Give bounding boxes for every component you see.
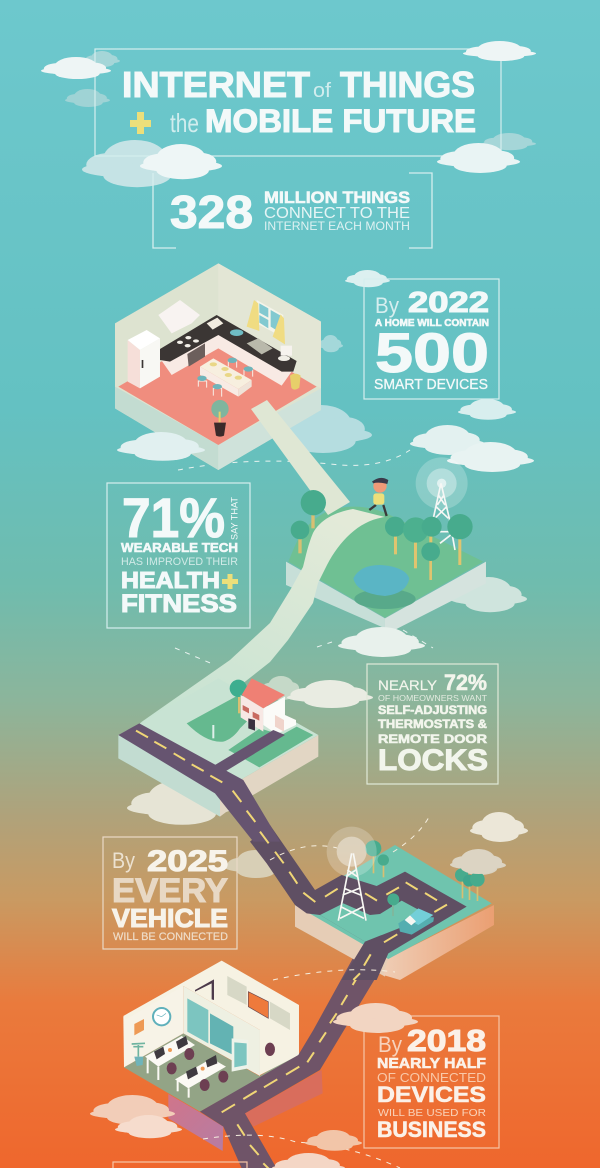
panel: 71 percent wearable: [107, 483, 250, 628]
panel: nearly 72 percent: OF HOMEOWNERS WANT: [378, 693, 487, 703]
fridge: [128, 340, 140, 388]
cloud: pale left: [65, 89, 110, 107]
car: [398, 908, 434, 935]
panel: by 2025: EVERY: [112, 872, 228, 910]
panel: by 2022: 500: [375, 321, 489, 384]
glow over tower: [327, 827, 377, 877]
pond: [353, 565, 409, 596]
glass door: [232, 1038, 248, 1072]
stat: 328 million things: CONNECT TO THE: [264, 205, 410, 222]
cloud: left of tower: [225, 850, 285, 878]
panel: by 2022: By: [375, 293, 399, 318]
panel: by 2018: DEVICES: [377, 1082, 486, 1107]
house island top: [118, 678, 318, 792]
radio tower: [433, 483, 455, 550]
stat: 328 million things: [170, 186, 410, 238]
scene: hill foreground: [291, 457, 473, 580]
panel: nearly 72 percent: REMOTE DOOR: [378, 732, 487, 746]
trash bin: [290, 374, 301, 390]
road loop: [250, 825, 467, 980]
wall art: [134, 1019, 144, 1035]
hill top: [288, 507, 483, 618]
cloud: small by stat: [345, 270, 390, 287]
car island left side: [295, 903, 388, 977]
stools: [198, 361, 253, 397]
scene: house island: [118, 678, 318, 843]
panel: by 2018: NEARLY HALF: [377, 1056, 486, 1072]
panel: by 2018: By: [378, 1032, 402, 1057]
scene: park hill island: [286, 507, 486, 634]
inner lawn: [320, 901, 430, 942]
cloud: mid right 1: [458, 399, 516, 420]
desk 2: [175, 1055, 226, 1098]
cloud: under room: [117, 432, 205, 461]
scene: office island: [123, 948, 393, 1168]
car island top: [295, 845, 492, 959]
counter top: [160, 315, 297, 372]
hill left side: [286, 562, 385, 628]
cloud: mid right 2: [410, 425, 485, 455]
cloud: white top left: [41, 57, 111, 79]
road: [200, 948, 393, 1168]
panel: by 2022: A HOME WILL CONTAIN: [375, 318, 489, 329]
road dashes: [136, 731, 269, 843]
cloud: white right: [437, 143, 520, 173]
curtains: [247, 300, 259, 331]
island counter: [200, 367, 238, 397]
footpath from room to hill: [251, 400, 350, 515]
panel: by 2018: 2018: [407, 1023, 486, 1058]
panel: by 2022: SMART DEVICES: [374, 377, 488, 393]
radio tower glow: [416, 457, 468, 509]
house door: [248, 718, 255, 731]
house walls: [241, 695, 263, 732]
panel: nearly 72 percent: [367, 664, 498, 784]
title line 1: of: [313, 80, 331, 102]
dashed orbit at hill: [175, 630, 433, 665]
road branch: [215, 730, 285, 772]
tree: [230, 680, 247, 713]
scene: connected car island: [250, 825, 505, 980]
cloud: under house: [127, 780, 233, 825]
panel: by 2018: OF CONNECTED: [377, 1070, 486, 1085]
dashed orbit around room: [178, 450, 410, 470]
panel: nearly 72 percent: NEARLY: [378, 677, 438, 693]
cloud: mid right 3: [447, 442, 534, 472]
panel: 71 percent wearable: HAS IMPROVED THEIR: [121, 556, 238, 568]
back wall window panels: [227, 976, 247, 1005]
cloud: over trees: [450, 849, 505, 874]
platform sides: [115, 387, 218, 470]
office plant: [132, 1043, 145, 1066]
partition wall: [183, 986, 260, 1076]
back wall: [123, 961, 299, 1075]
title line 1: INTERNET: [122, 64, 310, 105]
small tree: [387, 893, 399, 916]
house windows: [243, 705, 284, 732]
wall clock: [153, 1008, 170, 1025]
scene: kitchen room island: [115, 263, 321, 470]
house island left side: [118, 735, 220, 817]
small figure: [212, 725, 214, 738]
panel: nearly 72 percent: THERMOSTATS &: [378, 717, 487, 731]
title line 1: THINGS: [340, 64, 475, 105]
panel: by 2018: [364, 1016, 499, 1148]
panel: 71 percent wearable: WEARABLE TECH: [121, 540, 238, 555]
cloud: pale right: [482, 133, 536, 150]
tree: left: [291, 521, 309, 553]
panel: by 2018: BUSINESS: [377, 1117, 486, 1142]
left wall: [123, 983, 183, 1067]
floor: [118, 328, 317, 445]
cloud: pale top left: [84, 51, 120, 67]
road: [118, 723, 280, 842]
tree: upper left: [301, 490, 326, 528]
title line 2: MOBILE FUTURE: [205, 103, 476, 139]
trees behind: [365, 840, 389, 877]
cloud: behind hill: [450, 577, 527, 612]
glass partition: [187, 998, 208, 1043]
cloud: below hill: [338, 627, 425, 657]
cloud: white top right: [463, 41, 536, 61]
cloud: right of house: [287, 680, 373, 708]
house roof: [242, 678, 285, 708]
panel: by 2022: 2022: [408, 287, 489, 319]
cloud: over road near 2018: [333, 1003, 418, 1033]
icon: yellow plus: [130, 112, 151, 134]
panel: by 2025: 2025: [147, 845, 228, 878]
panel: by 2025: WILL BE CONNECTED: [113, 931, 228, 943]
road dashes: [275, 852, 447, 980]
cloud: above trees: [451, 849, 506, 875]
title line 2: the: [170, 108, 199, 138]
panel: by 2025: [103, 837, 237, 949]
stat frame brackets: [153, 173, 432, 248]
runner: [369, 478, 388, 516]
cloud: white left: [140, 144, 222, 179]
cloud: bottom: [272, 1153, 345, 1168]
sink: [247, 338, 273, 354]
office floor: [124, 1033, 299, 1112]
stat: 328 million things: 328: [170, 186, 253, 238]
panel: by 2022: [364, 279, 499, 399]
desk 1: [145, 1036, 195, 1080]
next panel frame, cropped: [113, 1162, 247, 1168]
cloud: big pale left: [82, 140, 188, 187]
title: [122, 64, 476, 139]
winding path: [140, 509, 385, 723]
burners: [177, 336, 199, 347]
cloud: behind room right: [318, 335, 343, 352]
panel: by 2018: WILL BE USED FOR: [378, 1107, 486, 1119]
radio tower: [338, 853, 366, 921]
car island right side: [383, 905, 494, 980]
cloud: office left 2: [115, 1115, 182, 1138]
counter fronts: [160, 333, 292, 386]
title frame: [95, 49, 501, 156]
dashed arcs around towers: [203, 815, 430, 1168]
kitchen items: [207, 318, 223, 330]
cloud: right of road: [470, 812, 528, 842]
panel: by 2025: By: [112, 848, 135, 873]
panel: 71 percent wearable: HEALTH: [121, 567, 220, 593]
range hood: [158, 300, 200, 333]
title line 1: [122, 64, 475, 105]
stat: 328 million things: INTERNET EACH MONTH: [264, 219, 410, 233]
trees right: [455, 868, 485, 901]
panel: 71 percent wearable: 71%: [122, 486, 225, 549]
window: [257, 300, 283, 337]
hill right side: [385, 562, 486, 634]
road dashes: [222, 955, 370, 1168]
tree cluster: [385, 514, 473, 580]
office sides: [168, 1094, 223, 1151]
house island right side: [220, 735, 318, 817]
stat: 328 million things: MILLION THINGS: [264, 188, 410, 207]
cloud: office left 1: [90, 1095, 175, 1125]
cloud: big behind room: [270, 405, 372, 453]
chairs: [167, 1043, 275, 1091]
oven: [187, 343, 205, 367]
room walls: [115, 263, 321, 470]
panel: nearly 72 percent: 72%: [444, 670, 487, 695]
panel: nearly 72 percent: SELF-ADJUSTING: [378, 703, 487, 717]
pond shadow: [354, 589, 416, 609]
panel: 71 percent wearable: FITNESS: [121, 590, 237, 618]
panel: by 2025: VEHICLE: [112, 903, 228, 933]
panel: 71 percent wearable: SAY THAT: [230, 497, 240, 540]
panel: nearly 72 percent: LOCKS: [378, 744, 488, 777]
lawn: [187, 693, 248, 742]
lawn right: [228, 727, 313, 767]
potted plant: [211, 400, 229, 437]
cloud: lower right: [305, 1130, 362, 1151]
cloud: behind house pale: [260, 676, 302, 700]
